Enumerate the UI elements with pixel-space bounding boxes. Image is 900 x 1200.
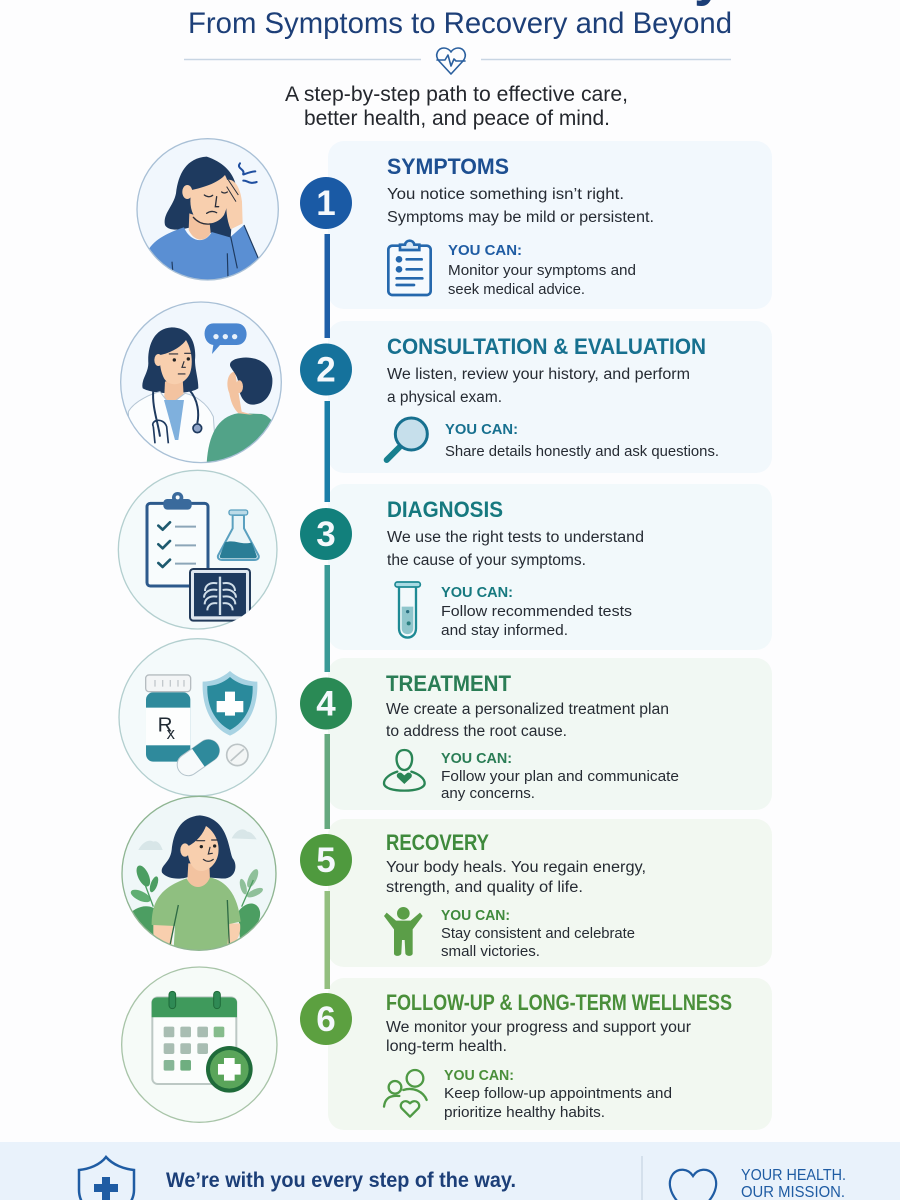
illustration: woman with headache bbox=[137, 139, 278, 283]
heading: consultation: CONSULTATION & EVALUATION bbox=[387, 334, 706, 359]
step number 4: 4 bbox=[316, 684, 336, 724]
description: symptoms: Symptoms may be mild or persistent. bbox=[387, 209, 654, 226]
description: follow-up bbox=[386, 1019, 691, 1055]
panel: consultation and evaluation bbox=[328, 321, 772, 473]
description: symptoms bbox=[387, 186, 654, 226]
icon: person with raised arms bbox=[384, 907, 423, 956]
you can: diagnosis: Follow recommended tests bbox=[441, 604, 632, 620]
description: follow-up: We monitor your progress and support your bbox=[386, 1019, 691, 1036]
illustration: doctor and patient consultation bbox=[121, 302, 283, 463]
you can: recovery bbox=[441, 908, 635, 960]
panel: recovery bbox=[328, 819, 772, 967]
you can: follow-up bbox=[444, 1068, 672, 1121]
footer mission text: YOUR HEALTH. bbox=[741, 1167, 846, 1184]
panel: treatment bbox=[328, 658, 772, 810]
panel: symptoms bbox=[328, 141, 772, 309]
description: treatment bbox=[386, 701, 669, 740]
you can: symptoms bbox=[448, 243, 636, 298]
illustration: medication and shield bbox=[119, 639, 276, 796]
step number 2 bbox=[300, 344, 352, 396]
heading: treatment: TREATMENT bbox=[386, 671, 512, 696]
you can: treatment bbox=[441, 751, 679, 802]
heading: symptoms: SYMPTOMS bbox=[387, 154, 509, 179]
description: consultation bbox=[387, 366, 690, 406]
x-ray bbox=[190, 569, 250, 621]
step number 6 bbox=[300, 993, 352, 1045]
description: consultation: a physical exam. bbox=[387, 389, 502, 406]
description: treatment: to address the root cause. bbox=[386, 723, 567, 740]
subtitle bbox=[285, 83, 628, 130]
step number 3 bbox=[300, 508, 352, 560]
subtitle: better health, and peace of mind. bbox=[304, 107, 610, 130]
you can: consultation: YOU CAN: bbox=[445, 422, 518, 438]
you can: diagnosis: YOU CAN: bbox=[441, 585, 513, 601]
step number 1 bbox=[300, 177, 352, 229]
heading: recovery: RECOVERY bbox=[386, 830, 489, 855]
description: recovery: Your body heals. You regain energy, bbox=[386, 859, 646, 876]
description: consultation: We listen, review your history, and perform bbox=[387, 366, 690, 383]
you can: consultation bbox=[445, 422, 719, 460]
you can: recovery: YOU CAN: bbox=[441, 908, 510, 924]
step number 3: 3 bbox=[316, 515, 336, 554]
heading: diagnosis: DIAGNOSIS bbox=[387, 497, 503, 522]
step number 1: 1 bbox=[316, 184, 336, 223]
you can: symptoms: seek medical advice. bbox=[448, 282, 585, 298]
panel: diagnosis bbox=[328, 484, 772, 650]
you can: treatment: any concerns. bbox=[441, 786, 535, 802]
icon: heart outline bbox=[670, 1170, 716, 1200]
subtitle: A step-by-step path to effective care, bbox=[285, 83, 628, 106]
heading: follow-up: FOLLOW-UP & LONG-TERM WELLNESS bbox=[386, 990, 732, 1015]
icon: clipboard checklist bbox=[388, 241, 431, 295]
title: From Symptoms to Recovery and Beyond bbox=[188, 7, 732, 40]
icon: people and heart bbox=[384, 1070, 427, 1117]
illustration: clipboard, flask and x-ray bbox=[118, 470, 277, 629]
step number 5 bbox=[300, 834, 352, 886]
flask bbox=[218, 510, 259, 560]
you can: recovery: Stay consistent and celebrate bbox=[441, 926, 635, 942]
icon: test tube bbox=[395, 582, 420, 638]
you can: recovery: small victories. bbox=[441, 944, 540, 960]
step number 5: 5 bbox=[316, 841, 336, 880]
illustration: recovered woman with plants bbox=[122, 796, 276, 953]
description: diagnosis bbox=[387, 529, 644, 569]
icon: heart with pulse bbox=[437, 48, 465, 74]
you can: diagnosis: and stay informed. bbox=[441, 623, 568, 639]
illustration: calendar with plus bbox=[122, 967, 277, 1122]
you can: follow-up: Keep follow-up appointments and bbox=[444, 1086, 672, 1102]
icon: magnifying glass bbox=[387, 418, 427, 460]
description: symptoms: You notice something isn’t right. bbox=[387, 186, 624, 203]
footer message: We’re with you every step of the way. bbox=[166, 1169, 516, 1192]
description: recovery bbox=[386, 859, 646, 896]
you can: consultation: Share details honestly and ask questions. bbox=[445, 444, 719, 460]
illustration: medication and shield: x bbox=[167, 724, 176, 743]
you can: treatment: Follow your plan and communicate bbox=[441, 769, 679, 785]
description: treatment: We create a personalized treatment plan bbox=[386, 701, 669, 718]
timeline line bbox=[324, 234, 330, 989]
you can: diagnosis bbox=[441, 585, 632, 639]
footer band bbox=[0, 1142, 900, 1200]
icon: shield with cross bbox=[79, 1157, 134, 1200]
footer mission text bbox=[741, 1167, 846, 1200]
you can: symptoms: Monitor your symptoms and bbox=[448, 263, 636, 279]
description: follow-up: long-term health. bbox=[386, 1038, 507, 1055]
you can: follow-up: YOU CAN: bbox=[444, 1068, 514, 1084]
panel: follow-up and long-term wellness bbox=[328, 978, 772, 1130]
step number 4 bbox=[300, 678, 352, 730]
description: recovery: strength, and quality of life. bbox=[386, 879, 583, 896]
you can: symptoms: YOU CAN: bbox=[448, 243, 522, 259]
step number 6: 6 bbox=[316, 1000, 336, 1039]
description: diagnosis: the cause of your symptoms. bbox=[387, 552, 586, 569]
step number 2: 2 bbox=[316, 350, 336, 390]
description: diagnosis: We use the right tests to understand bbox=[387, 529, 644, 546]
illustration: medication and shield: R bbox=[158, 714, 173, 737]
icon: person holding heart bbox=[384, 750, 425, 791]
you can: treatment: YOU CAN: bbox=[441, 751, 512, 767]
you can: follow-up: prioritize healthy habits. bbox=[444, 1105, 605, 1121]
